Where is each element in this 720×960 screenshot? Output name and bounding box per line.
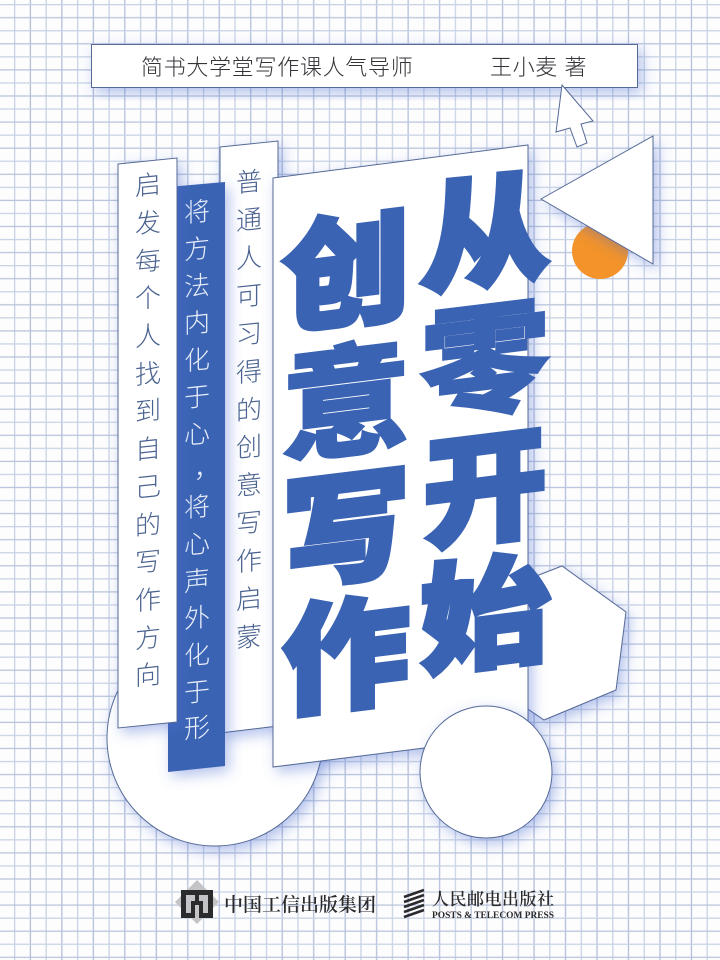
- panel: strip normal people: [220, 141, 278, 733]
- orange circle: [572, 223, 628, 279]
- logo: Posts and Telecom Press: [404, 890, 554, 921]
- title column: from zero: [420, 160, 550, 692]
- title column: from zero: 零: [420, 287, 550, 438]
- group name: 中国工信出版集团: [224, 894, 376, 916]
- icon: group mark: [181, 890, 213, 918]
- text: strip inspire: 启发每个人找到自己的写作方向: [135, 169, 161, 691]
- panel: strip inspire: [118, 158, 177, 728]
- panel: blue strip: [168, 182, 225, 772]
- title column: from zero: 始: [420, 541, 550, 692]
- author: 王小麦 著: [490, 55, 587, 80]
- logo: China Industry and Information publishing group: [175, 880, 376, 924]
- small circle: [420, 706, 552, 838]
- large circle: [107, 630, 323, 846]
- text: strip normal people: 普通人可习得的创意写作启蒙: [236, 166, 262, 653]
- title column: creative writing: 作: [282, 584, 410, 733]
- title column: from zero: 开: [423, 415, 547, 565]
- triangle: [541, 136, 653, 264]
- panel: main title panel: [273, 145, 528, 767]
- publisher name: 人民邮电出版社: [432, 890, 554, 909]
- title column: creative writing: 意: [281, 329, 411, 480]
- title column: creative writing: 创: [282, 201, 410, 350]
- icon: stacked sheets: [404, 890, 424, 917]
- title column: creative writing: 写: [282, 457, 410, 606]
- icon: cursor arrow: [556, 85, 593, 147]
- endorsement text: 简书大学堂写作课人气导师: [141, 55, 413, 80]
- header bar: [92, 44, 638, 88]
- title column: from zero: 从: [420, 160, 550, 311]
- publisher English name: POSTS & TELECOM PRESS: [432, 910, 554, 921]
- title column: creative writing: [281, 201, 411, 733]
- text: blue strip: 将方法内化于心，将心声外化于形: [184, 195, 220, 744]
- hexagon: [500, 566, 626, 720]
